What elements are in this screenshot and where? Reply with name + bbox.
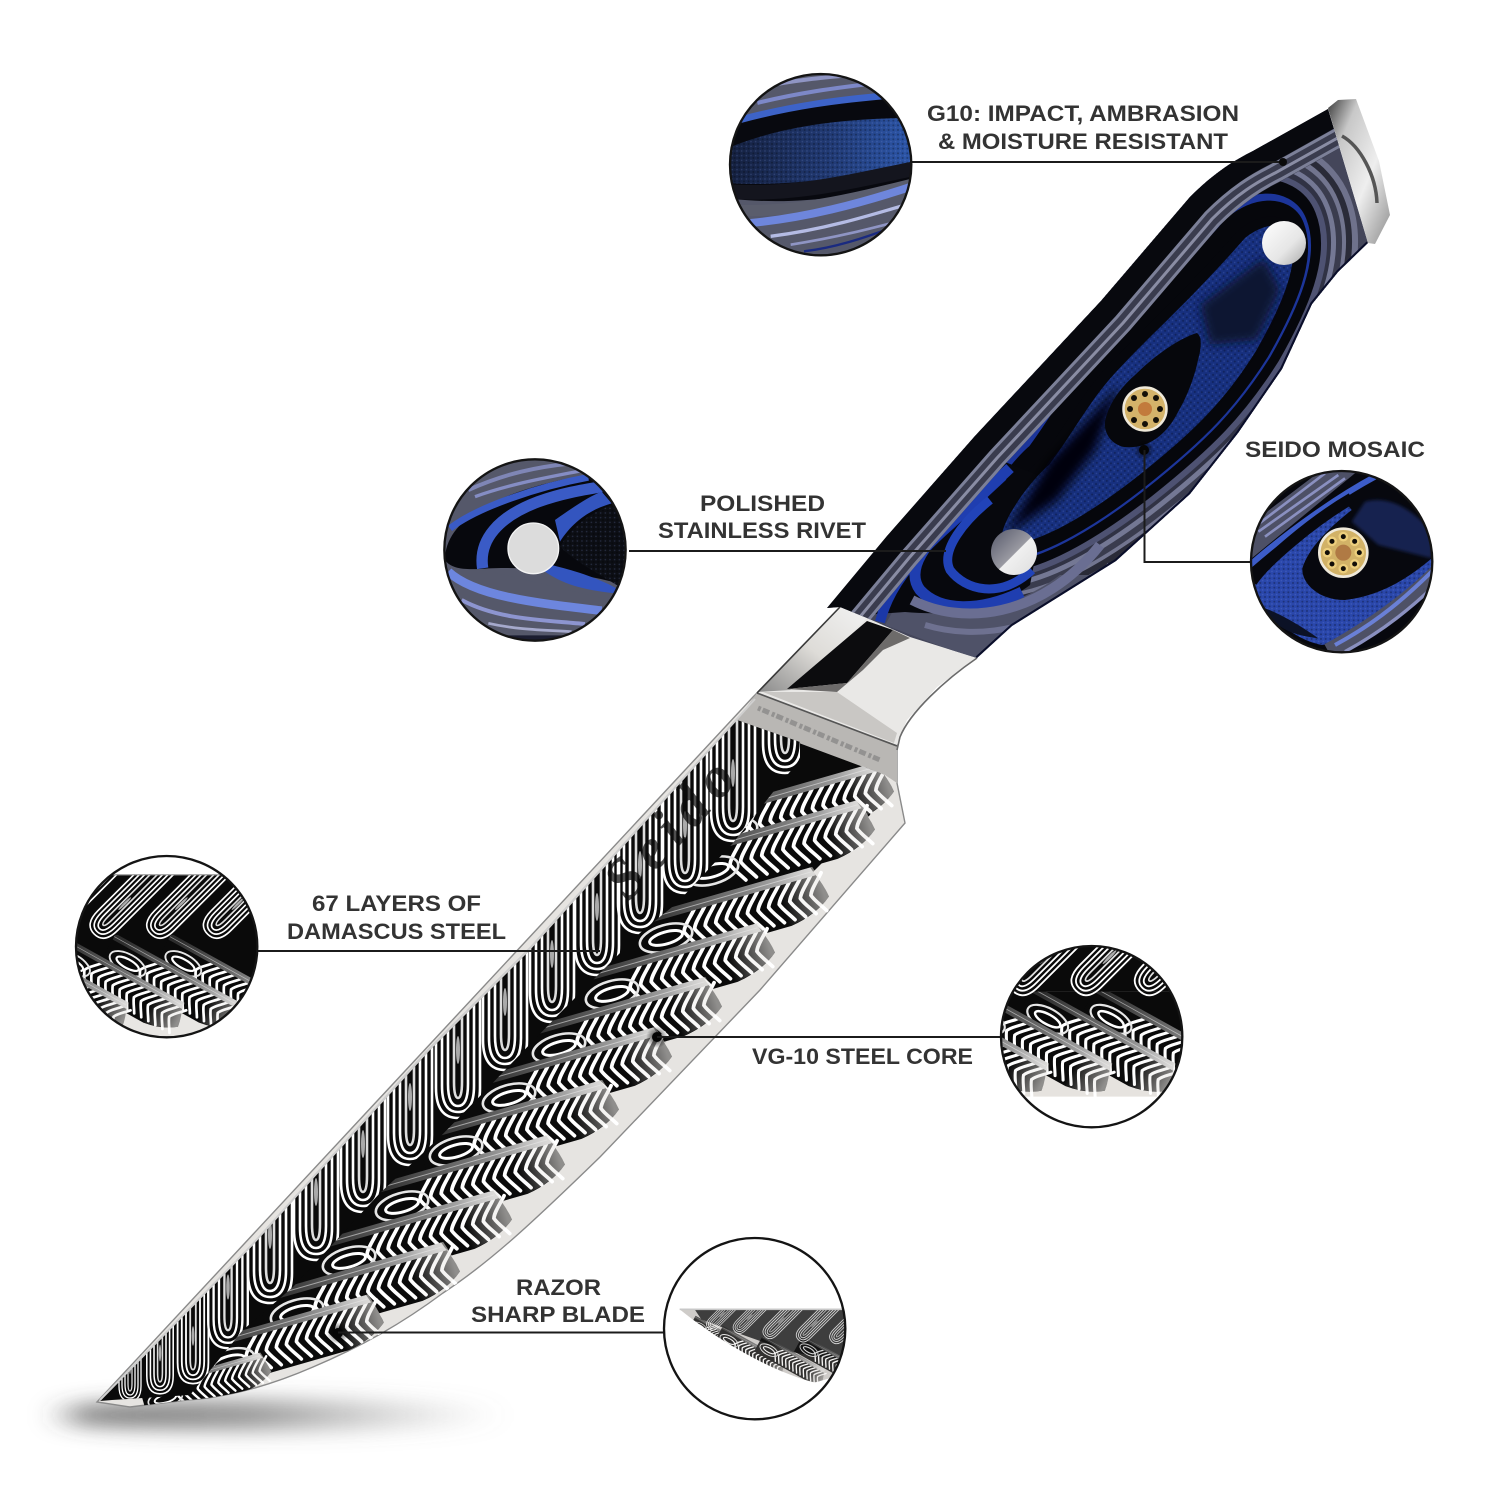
label: rivet: [658, 491, 866, 543]
detail circle: razor edge: [662, 1236, 846, 1420]
spine highlight: [100, 699, 755, 1400]
bolster: [757, 607, 977, 750]
handle rims: [977, 243, 1368, 658]
label: rivet: POLISHED: [700, 491, 825, 516]
tang outer edge: [897, 658, 977, 750]
etched steel marks: [758, 708, 880, 760]
concentric grey stripes: [991, 215, 1290, 542]
detail circle: G10 weave: [724, 68, 917, 261]
etched logo: Seido: [589, 746, 748, 912]
handle G10 scales: [820, 90, 1380, 670]
butt cap: [1328, 99, 1390, 244]
detail circle: mosaic: [1245, 465, 1438, 658]
dark area by top rivet: [1200, 258, 1280, 345]
big blue area: [1002, 226, 1293, 545]
black reflection: [787, 621, 893, 689]
handle base: [820, 90, 1380, 670]
blade base steel: [97, 688, 905, 1407]
seido mosaic pin: [1124, 388, 1166, 430]
label: damascus: DAMASCUS STEEL: [287, 919, 506, 944]
label: VG-10: VG-10 STEEL CORE: [752, 1044, 973, 1069]
knife blade with damascus pattern: [96, 692, 906, 1408]
lower polished facet: [763, 692, 897, 743]
leader: VG-10: [646, 1026, 1001, 1048]
label: razor: [471, 1275, 645, 1327]
label: G10: & MOISTURE RESISTANT: [938, 129, 1228, 154]
detail circle: rivet: [438, 453, 632, 647]
dark smear lower: [1005, 385, 1120, 535]
leader: razor: [327, 1322, 664, 1344]
lower-left rings around rivet: [860, 460, 1110, 660]
upper edge stripes: [834, 116, 1356, 636]
tang band: [757, 607, 977, 745]
leader: mosaic: [1134, 440, 1250, 562]
label: seido mosaic: SEIDO MOSAIC: [1245, 437, 1425, 462]
label: damascus: 67 LAYERS OF: [312, 891, 481, 916]
damascus upper loops: [100, 720, 800, 1401]
detail circle: VG-10 core: [1000, 944, 1184, 1128]
leader: rivet: [629, 550, 946, 552]
leader: damascus: [258, 950, 600, 952]
label: rivet: STAINLESS RIVET: [658, 518, 866, 543]
bolster left reflection: [757, 607, 867, 692]
label: razor: SHARP BLADE: [471, 1302, 645, 1327]
leader: G10: [912, 158, 1287, 166]
damascus feather chevrons: [139, 720, 899, 1419]
rivet: lower stainless: [991, 529, 1037, 575]
black teardrop: [1105, 333, 1201, 447]
label: razor: RAZOR: [516, 1275, 601, 1300]
grey reflection: [787, 630, 910, 692]
detail circle: damascus layers: [74, 854, 258, 1038]
label: G10: G10: IMPACT, AMBRASION: [927, 101, 1239, 126]
polished steel above pattern: [737, 693, 897, 783]
rivet: top stainless: [1262, 221, 1306, 265]
ground shadow under blade tip: [40, 1401, 510, 1429]
label: damascus: [287, 891, 506, 944]
label: G10: [927, 101, 1239, 154]
